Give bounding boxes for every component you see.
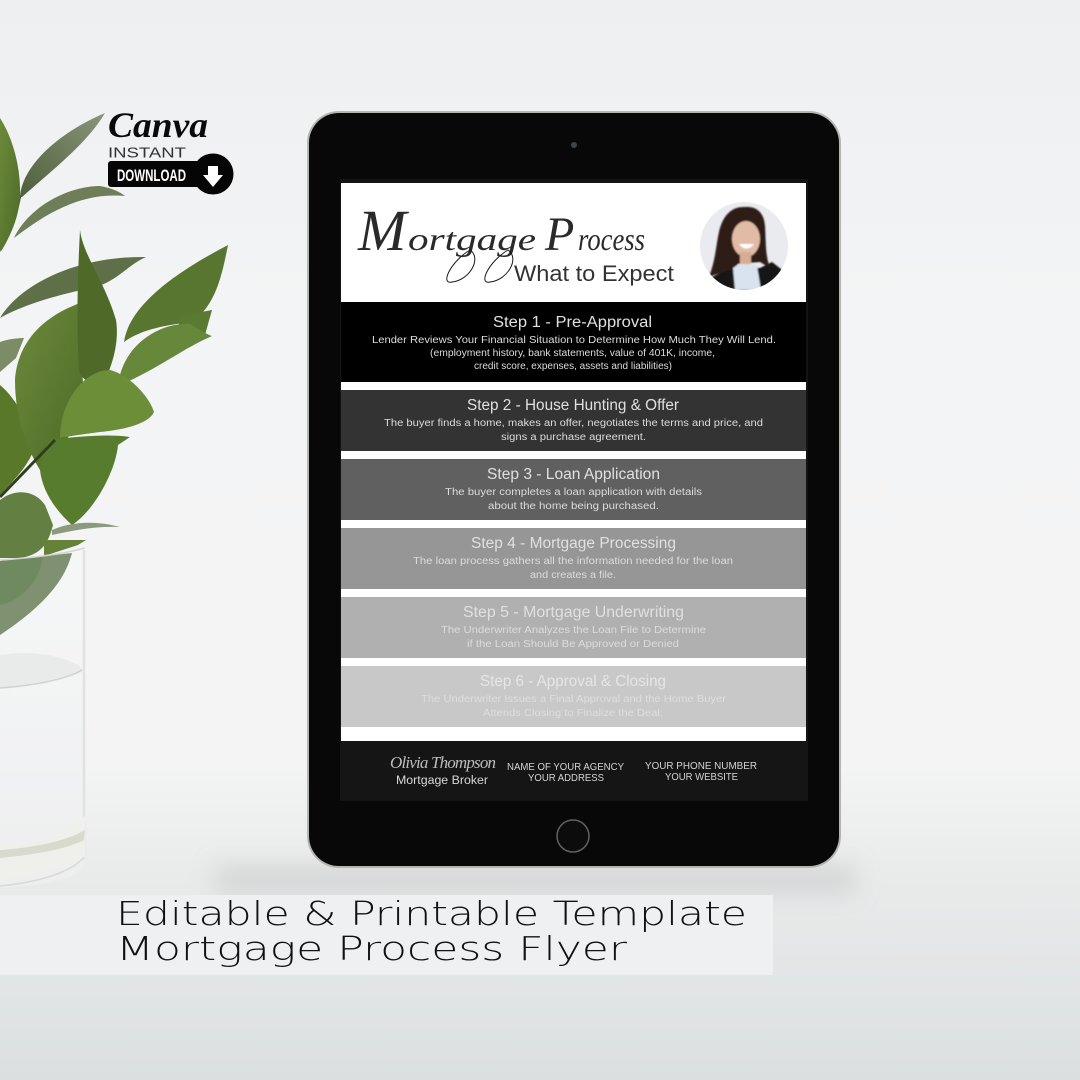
caption text: Editable & Printable Template bbox=[116, 894, 747, 933]
step 3: about the home being purchased. bbox=[488, 501, 659, 512]
caption banner bbox=[0, 894, 773, 975]
contact details bbox=[645, 761, 757, 783]
agency details: NAME OF YOUR AGENCY bbox=[507, 762, 624, 773]
subtitle: What to Expect bbox=[514, 261, 674, 286]
script title: ortgage bbox=[408, 221, 536, 257]
step 5 bbox=[341, 597, 806, 658]
broker role: Mortgage Broker bbox=[396, 775, 488, 787]
step 6: Attends Closing to Finalize the Deal. bbox=[483, 708, 663, 719]
divider band bbox=[341, 382, 806, 741]
step 1 bbox=[341, 302, 806, 382]
step 1: credit score, expenses, assets and liabilities) bbox=[474, 361, 672, 372]
contact details: YOUR PHONE NUMBER bbox=[645, 761, 757, 772]
step 6: The Underwriter Issues a Final Approval and the Home Buyer bbox=[421, 694, 727, 705]
step 2: Step 2 - House Hunting & Offer bbox=[467, 397, 679, 414]
upper leaves bbox=[0, 195, 20, 250]
tablet bbox=[307, 111, 841, 868]
home button bbox=[557, 820, 589, 852]
script title bbox=[357, 198, 645, 282]
contact details: YOUR WEBSITE bbox=[665, 772, 738, 783]
icon: download arrow bbox=[203, 166, 223, 187]
script title: rocess bbox=[578, 221, 645, 257]
step 5: The Underwriter Analyzes the Loan File to Determine bbox=[441, 625, 706, 636]
step 1: Step 1 - Pre-Approval bbox=[493, 314, 652, 331]
download bar bbox=[108, 161, 213, 187]
agency details: YOUR ADDRESS bbox=[528, 773, 604, 784]
step 6 bbox=[341, 666, 806, 727]
step 4: Step 4 - Mortgage Processing bbox=[471, 535, 676, 552]
leaf inside glass bbox=[0, 553, 72, 635]
instant label: INSTANT bbox=[108, 144, 186, 162]
step 1: (employment history, bank statements, value of 401K, income, bbox=[430, 348, 715, 359]
step 5: Step 5 - Mortgage Underwriting bbox=[463, 604, 684, 621]
broker signature: Olivia Thompson bbox=[390, 753, 496, 772]
glass base bbox=[0, 815, 85, 880]
flyer header bbox=[341, 183, 806, 302]
camera bbox=[571, 142, 577, 148]
plant bbox=[0, 113, 228, 558]
step 2: The buyer finds a home, makes an offer, negotiates the terms and price, and bbox=[384, 418, 763, 429]
flyer footer bbox=[340, 741, 808, 800]
step 3: The buyer completes a loan application with details bbox=[445, 487, 702, 498]
badge: Canva instant download bbox=[108, 105, 234, 194]
water line bbox=[0, 653, 82, 688]
step 3 bbox=[341, 459, 806, 520]
script title: M bbox=[357, 198, 409, 263]
step 2 bbox=[341, 390, 806, 451]
step 5: if the Loan Should Be Approved or Denied bbox=[467, 639, 679, 650]
tablet frame bbox=[307, 111, 841, 868]
caption text bbox=[116, 894, 747, 968]
background: wall bbox=[0, 0, 1080, 770]
step 4 bbox=[341, 528, 806, 589]
step 1: Lender Reviews Your Financial Situation to Determine How Much They Will Lend. bbox=[372, 335, 776, 346]
agency details bbox=[507, 762, 624, 784]
Canva logo text: Canva bbox=[108, 105, 208, 145]
background: table surface bbox=[0, 766, 1080, 1080]
badge: Canva instant download: DOWNLOAD bbox=[117, 166, 186, 185]
tablet shadow bbox=[215, 866, 855, 894]
lower cluster leaves bbox=[0, 385, 33, 495]
step 4: and creates a file. bbox=[530, 570, 616, 581]
step 4: The loan process gathers all the information needed for the loan bbox=[413, 556, 733, 567]
step 6: Step 6 - Approval & Closing bbox=[480, 673, 666, 690]
glass vase bbox=[0, 548, 85, 888]
step 3: Step 3 - Loan Application bbox=[487, 466, 660, 483]
caption text: Mortgage Process Flyer bbox=[116, 929, 628, 968]
step 2: signs a purchase agreement. bbox=[501, 432, 646, 443]
script title: P bbox=[544, 208, 574, 261]
screen backing bbox=[340, 179, 808, 801]
portrait photo bbox=[700, 202, 790, 295]
